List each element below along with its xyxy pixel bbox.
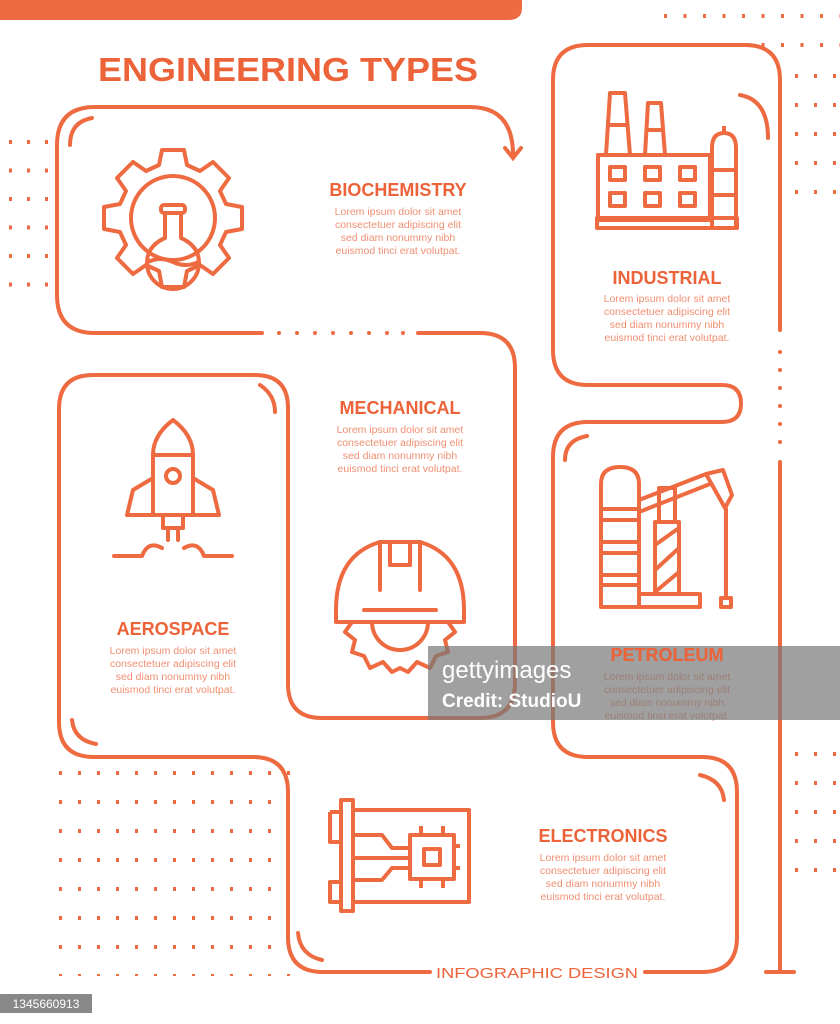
watermark: PETROLEUM <box>610 645 724 665</box>
heading: electronics: consectetuer adipiscing elit <box>540 865 666 877</box>
heading: mechanical: euismod tinci erat volutpat. <box>338 463 462 475</box>
icon: rocket <box>114 420 232 556</box>
heading: petroleum <box>604 645 730 722</box>
heading: industrial: euismod tinci erat volutpat. <box>605 332 729 344</box>
heading: industrial: consectetuer adipiscing elit <box>604 306 730 318</box>
heading: biochemistry <box>329 180 467 257</box>
image id: 1345660913 <box>13 997 80 1011</box>
heading: petroleum: Lorem ipsum dolor sit amet <box>604 671 730 683</box>
heading: mechanical <box>337 398 463 475</box>
heading: electronics: euismod tinci erat volutpat. <box>541 891 665 903</box>
heading: petroleum: sed diam nonummy nibh <box>610 697 724 709</box>
icon: factory <box>597 93 737 228</box>
heading: electronics: sed diam nonummy nibh <box>546 878 660 890</box>
heading: petroleum: euismod tinci erat volutpat. <box>605 710 729 722</box>
heading: aerospace: Lorem ipsum dolor sit amet <box>110 645 236 657</box>
heading: industrial <box>604 268 730 344</box>
heading: biochemistry: BIOCHEMISTRY <box>329 180 467 200</box>
image id <box>0 994 92 1013</box>
heading: industrial: Lorem ipsum dolor sit amet <box>604 293 730 305</box>
flow lines <box>57 45 794 972</box>
heading: aerospace: consectetuer adipiscing elit <box>110 658 236 670</box>
top bar <box>0 0 522 20</box>
heading: electronics: ELECTRONICS <box>538 826 668 846</box>
icon: hard hat with gear <box>336 542 464 672</box>
heading: electronics <box>538 826 668 903</box>
watermark <box>428 645 840 720</box>
inner corner arcs <box>70 118 92 145</box>
watermark: Credit: StudioU <box>442 691 581 712</box>
heading: mechanical: sed diam nonummy nibh <box>343 450 457 462</box>
heading: industrial: sed diam nonummy nibh <box>610 319 724 331</box>
heading: aerospace: sed diam nonummy nibh <box>116 671 230 683</box>
title: ENGINEERING TYPES <box>98 51 478 88</box>
icon: gear with flask <box>104 150 242 289</box>
heading: mechanical: Lorem ipsum dolor sit amet <box>337 424 463 436</box>
heading: aerospace: euismod tinci erat volutpat. <box>111 684 235 696</box>
heading: mechanical: consectetuer adipiscing elit <box>337 437 463 449</box>
heading: biochemistry: Lorem ipsum dolor sit amet <box>335 206 461 218</box>
icon: oil pump <box>601 467 732 607</box>
heading: biochemistry: sed diam nonummy nibh <box>341 232 455 244</box>
heading: electronics: Lorem ipsum dolor sit amet <box>540 852 666 864</box>
heading: petroleum: consectetuer adipiscing elit <box>604 684 730 696</box>
heading: aerospace <box>110 619 236 696</box>
icon: circuit board <box>330 800 469 911</box>
heading: biochemistry: consectetuer adipiscing elit <box>335 219 461 231</box>
footer label: INFOGRAPHIC DESIGN <box>436 965 638 982</box>
heading: industrial: INDUSTRIAL <box>612 268 722 288</box>
dotted connectors <box>277 331 782 444</box>
watermark: gettyimages <box>442 657 571 684</box>
heading: biochemistry: euismod tinci erat volutpat. <box>336 245 460 257</box>
heading: petroleum: PETROLEUM <box>610 645 724 665</box>
heading: mechanical: MECHANICAL <box>340 398 460 418</box>
heading: aerospace: AEROSPACE <box>117 619 229 639</box>
